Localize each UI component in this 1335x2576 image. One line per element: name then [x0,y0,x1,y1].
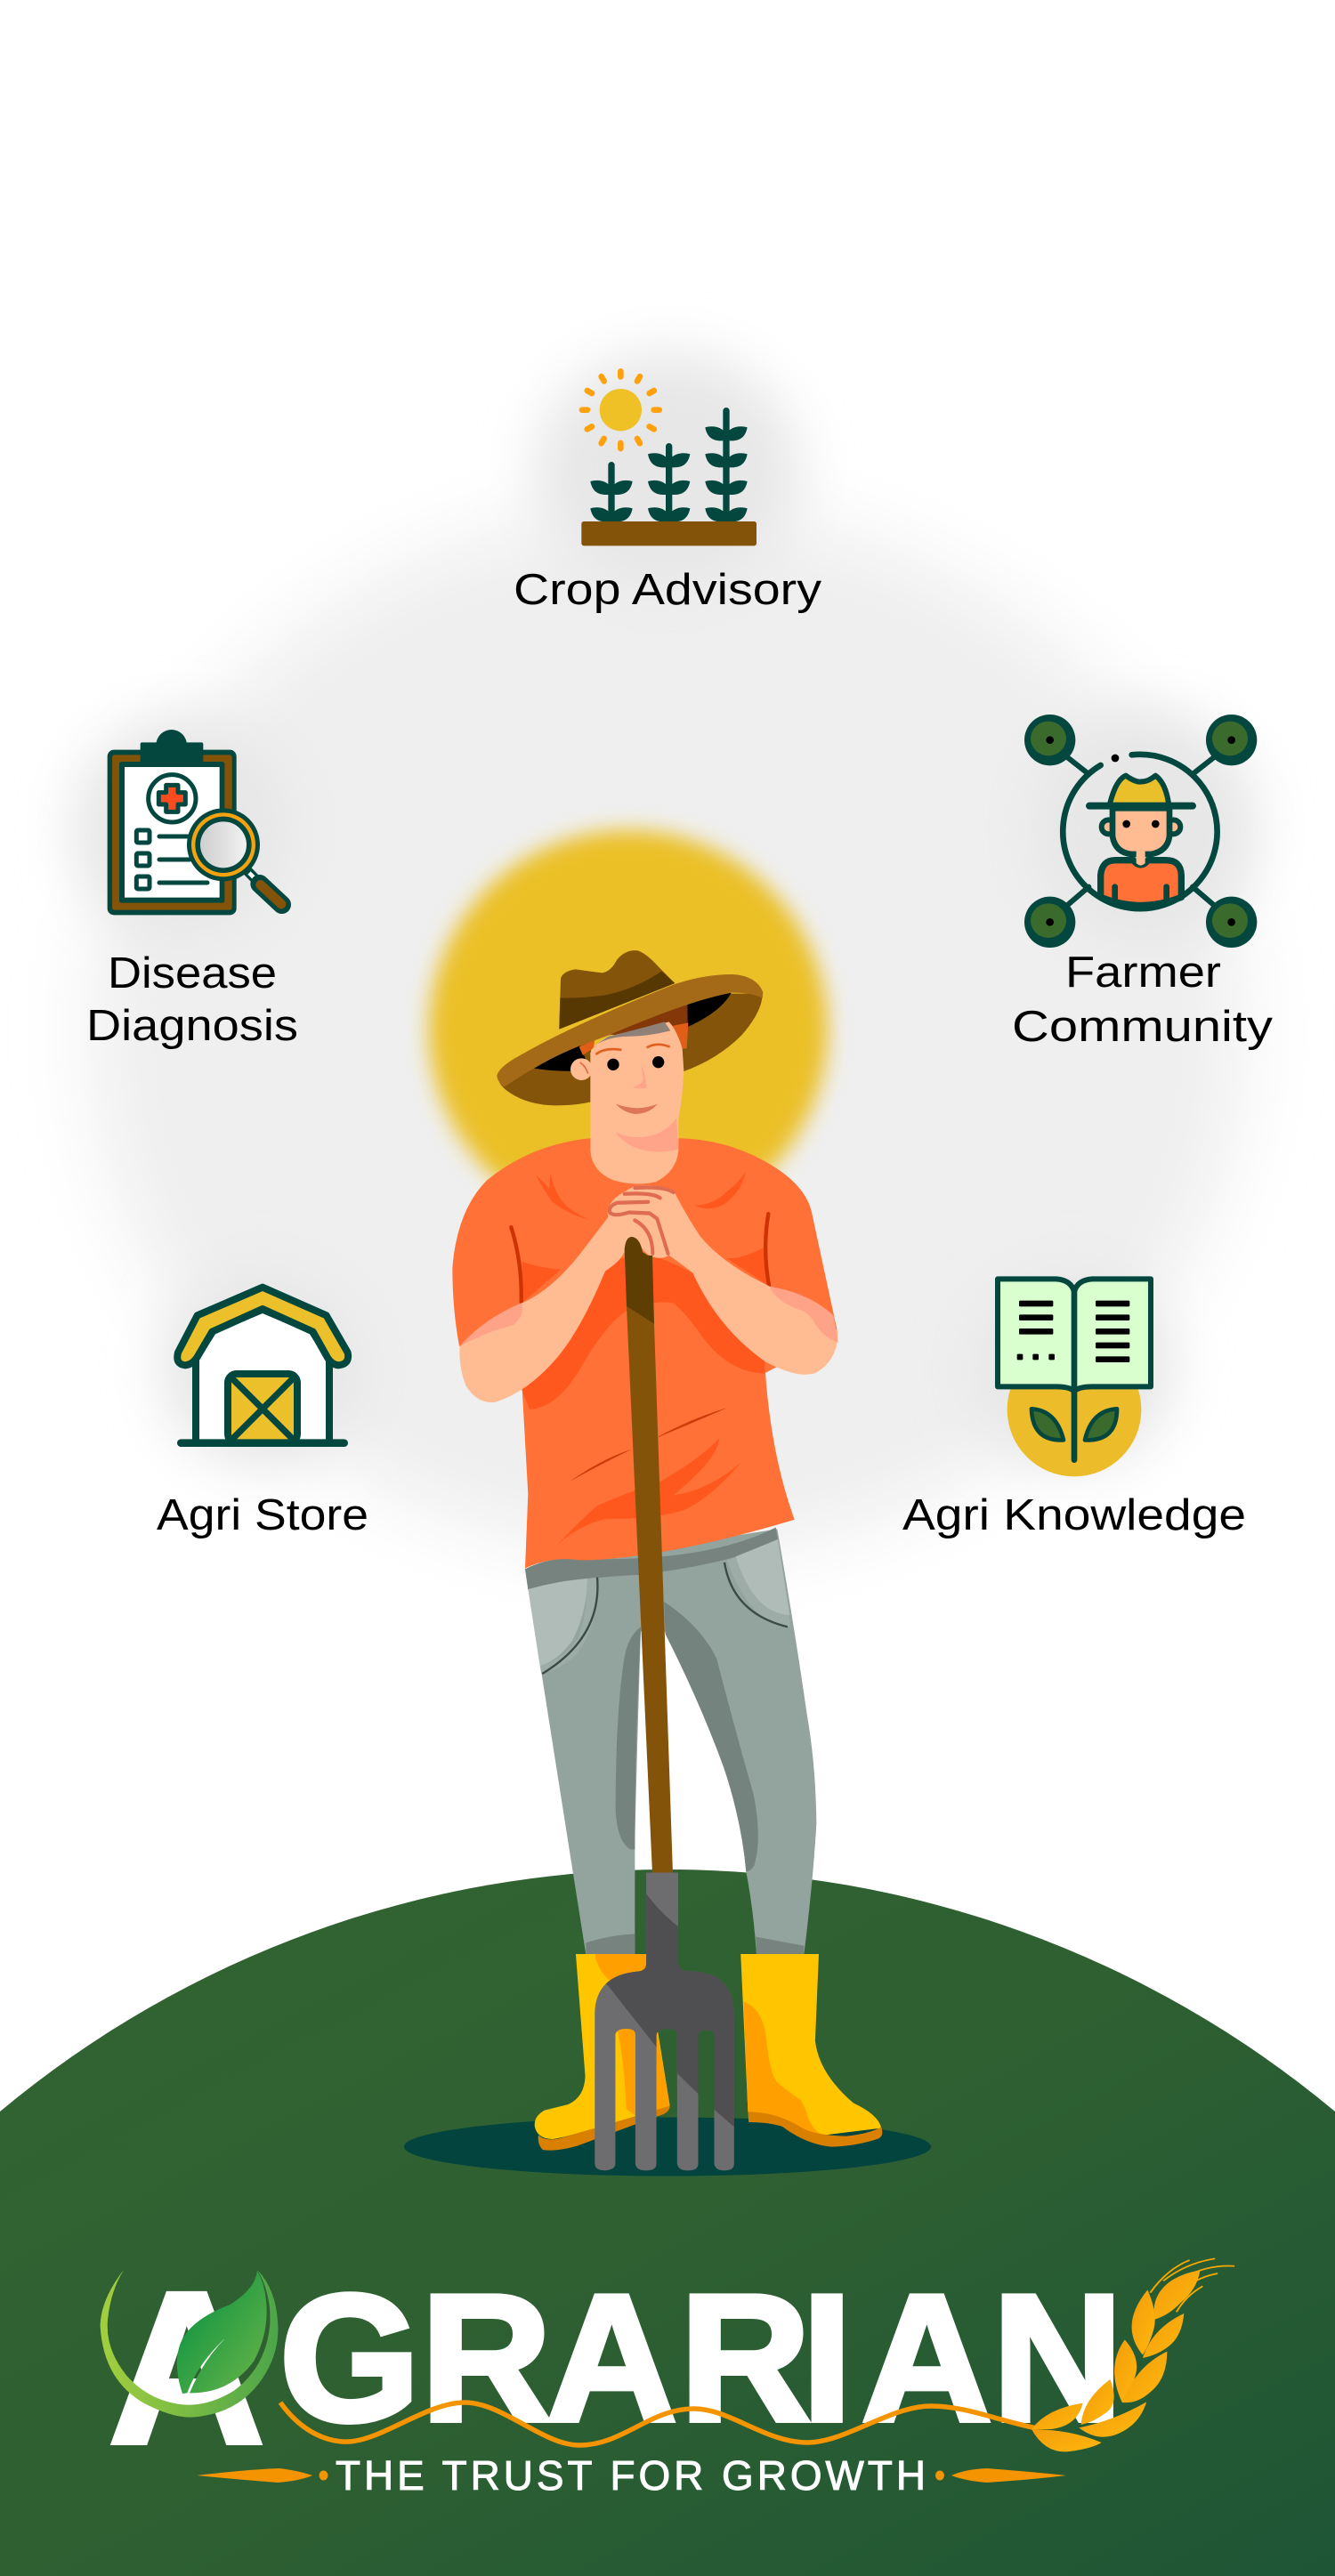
farmer avatar [1089,776,1193,905]
label: disease diagnosis: Disease [108,949,277,997]
label: farmer community: Community [1012,1003,1274,1051]
rubber boots [535,1954,882,2151]
green hill [0,1869,1335,2576]
soil bed [581,521,756,545]
logo wordmark AGRARIAN: A [109,2248,265,2489]
hat underside [497,994,763,1105]
logo wheat ear [1032,2258,1234,2451]
icon: disease diagnosis clipboard [108,730,282,915]
soft grey background glow [71,351,1259,1557]
icon: crop advisory [581,371,756,545]
arms and hands [459,1185,838,1402]
tagline: THE TRUST FOR GROWTH [336,2452,929,2499]
hat crown [559,950,675,1030]
label: crop advisory: Crop Advisory [514,566,822,614]
plants [590,411,748,521]
label: disease diagnosis: Diagnosis [86,1002,298,1050]
farmer illustration [404,950,931,2176]
label: agri store: Agri Store [157,1491,368,1539]
trousers [525,1528,816,1955]
hat brim [497,974,763,1087]
face [590,1022,684,1183]
neck and face [497,950,763,1183]
logo orange wave [280,2402,1037,2445]
label: disease diagnosis [86,949,298,1050]
pitchfork handle [625,1237,673,1874]
label: agri knowledge: Agri Knowledge [902,1491,1246,1539]
icon: agri store barn [177,1288,348,1443]
logo wordmark AGRARIAN: GRARIAN [279,2257,1123,2459]
magnifying glass [187,808,282,905]
tagline [197,2452,1066,2499]
pitchfork head [592,1869,737,2174]
shirt and arms [452,1138,838,1568]
label: farmer community: Farmer [1065,949,1221,997]
icon: farmer community network [1024,715,1257,948]
label: farmer community [1012,949,1274,1051]
yellow sun circle behind farmer [429,830,828,1229]
ground shadow [404,2118,931,2176]
sun [582,371,659,448]
logo leaf emblem [101,2270,278,2418]
icon: agri knowledge book [998,1279,1151,1476]
